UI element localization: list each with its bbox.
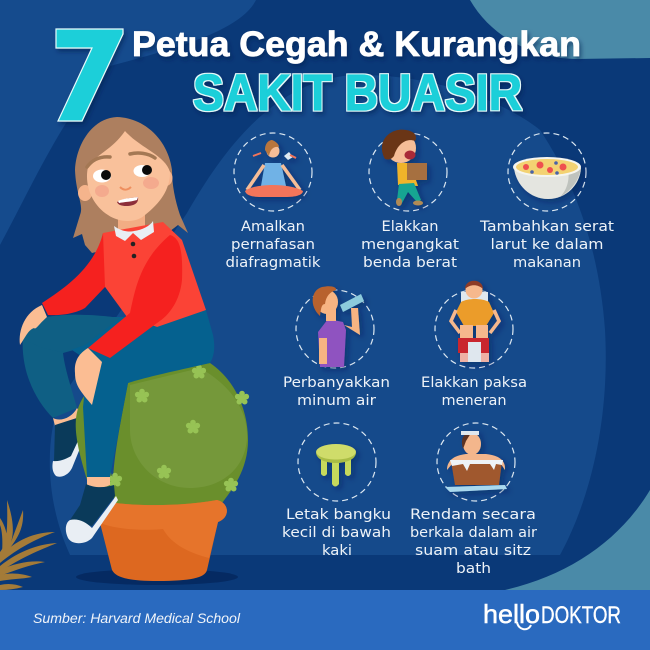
label: kecil di bawah xyxy=(282,525,391,541)
eyes xyxy=(93,170,111,182)
logo: DOKTOR xyxy=(541,602,621,629)
icon: man on toilet xyxy=(451,281,499,362)
logo xyxy=(483,599,621,629)
label: Rendam secara xyxy=(410,507,536,523)
big number 7 xyxy=(56,29,123,121)
label xyxy=(282,507,391,559)
label xyxy=(361,219,459,271)
tip 3: fibre xyxy=(479,133,614,271)
label: Amalkan xyxy=(241,219,305,235)
hair xyxy=(73,117,188,253)
icon: small stool xyxy=(316,444,356,486)
label: Tambahkan serat xyxy=(479,219,614,235)
label: suam atau sitz xyxy=(415,543,531,559)
label: benda berat xyxy=(363,255,457,271)
tip 6: stool xyxy=(282,423,391,559)
sweater body xyxy=(100,222,206,327)
label: makanan xyxy=(513,255,581,271)
near arm xyxy=(88,235,182,358)
icon: cereal bowl xyxy=(513,157,581,199)
label: meneran xyxy=(442,393,506,409)
label xyxy=(410,507,537,577)
woman xyxy=(20,117,214,543)
far arm xyxy=(42,233,105,315)
label: kaki xyxy=(322,543,352,559)
dashed circle xyxy=(437,423,515,501)
label xyxy=(479,219,614,271)
dashed circle xyxy=(234,133,312,211)
dashed circle xyxy=(435,290,513,368)
collar xyxy=(114,221,154,241)
decorative plant xyxy=(0,500,57,590)
label xyxy=(226,219,321,271)
jeans xyxy=(47,310,214,477)
dashed circle xyxy=(369,133,447,211)
tip 5: toilet xyxy=(421,281,527,409)
flower pot xyxy=(100,500,227,581)
icon: boy drinking water xyxy=(313,286,364,367)
cactus xyxy=(76,363,249,508)
cheeks xyxy=(95,185,109,197)
tip 7: sitz bath xyxy=(410,423,537,577)
woman's far leg and shoe xyxy=(23,316,110,477)
icon: boy with box xyxy=(382,130,427,206)
hands xyxy=(20,305,47,345)
icon: meditating woman xyxy=(245,140,303,197)
label: diafragmatik xyxy=(226,255,321,271)
label: mengangkat xyxy=(361,237,459,253)
nose xyxy=(120,187,131,190)
label: bath xyxy=(456,561,491,577)
title line 1: Petua Cegah & Kurangkan xyxy=(132,25,581,64)
label xyxy=(421,375,527,409)
label: larut ke dalam xyxy=(490,237,604,253)
eyebrows xyxy=(87,157,110,167)
label: Letak bangku xyxy=(286,507,391,523)
pot shadow xyxy=(76,569,238,585)
label: Elakkan paksa xyxy=(421,375,527,391)
sock and near shoe xyxy=(87,477,110,488)
tip 2: lifting xyxy=(361,130,459,271)
footer bar xyxy=(0,590,650,650)
source: Sumber: Harvard Medical School xyxy=(33,610,241,626)
dashed circle xyxy=(296,290,374,368)
logo: hello xyxy=(483,599,540,629)
label xyxy=(283,375,390,409)
label: pernafasan xyxy=(231,237,315,253)
icon: man in wooden tub xyxy=(445,431,507,492)
label: minum air xyxy=(297,393,376,409)
face xyxy=(87,131,170,221)
title line 2: SAKIT BUASIR xyxy=(193,64,522,121)
ears xyxy=(78,185,92,201)
tip 4: water xyxy=(283,286,390,409)
label: berkala dalam air xyxy=(410,525,537,541)
neck xyxy=(118,215,145,232)
mouth xyxy=(117,197,138,206)
label: Perbanyakkan xyxy=(283,375,390,391)
buttons xyxy=(131,242,135,246)
dashed circle xyxy=(508,133,586,211)
dashed circle xyxy=(298,423,376,501)
label: Elakkan xyxy=(382,219,438,235)
tip 1: breathing xyxy=(226,133,321,271)
